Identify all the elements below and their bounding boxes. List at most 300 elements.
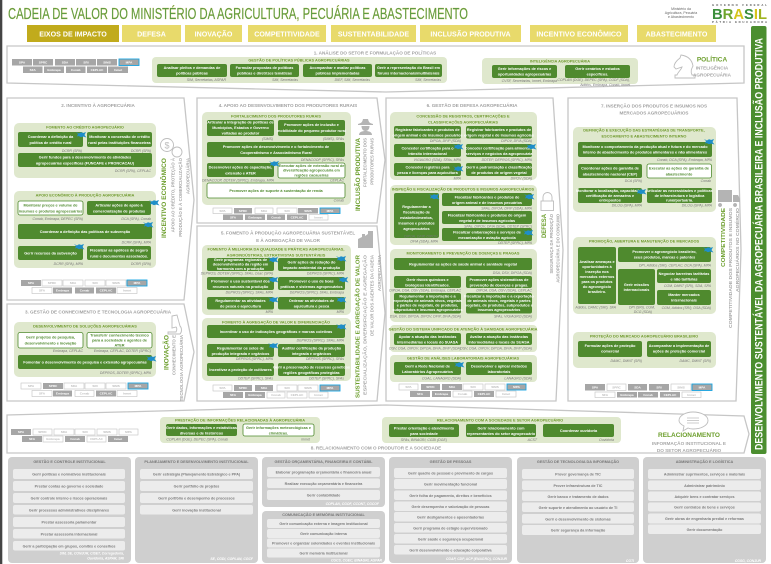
agency tags: Inmet	[123, 289, 131, 293]
process: monitorar preços: insumos e produtos agropecuários	[19, 210, 82, 214]
process: fiscalizar importação: de animais vivos, vegetais e partes	[467, 299, 531, 303]
agency tags: SFA	[39, 289, 46, 293]
process: monitorar preços: Conab, Embrapa, DEPEC (SPA)	[32, 217, 83, 221]
process: cenários e estudos: Adidos, Embrapa, Conab, Inmet	[579, 83, 631, 87]
process: padronização vegetal: de produtos de origem vegetal	[471, 171, 527, 175]
support panel: tecnologia da informação: Prover infraestrutura de TIC	[554, 484, 603, 488]
logo: Brasil government: PÁTRIA EDUCADORA	[712, 19, 767, 24]
process: auditar certificação: integrada e orgânicos	[292, 352, 331, 356]
group: estratégias de transporte	[573, 127, 716, 212]
process: produção orgânica: DEPROS (SPRC), MPA	[236, 357, 274, 361]
agency tags: MPA	[126, 60, 133, 64]
agency tags: SPA	[28, 281, 35, 285]
agency tags: Embrapa	[248, 393, 262, 397]
agency tags	[21, 280, 147, 294]
tab: abastecimento: ABASTECIMENTO	[646, 30, 708, 38]
tab: eixos de impacto: EIXOS DE IMPACTO	[39, 30, 107, 38]
icon: coins: $	[164, 140, 170, 150]
process: formular proteção: Formular ações de proteção	[585, 344, 636, 348]
agency tags: SPA	[219, 386, 226, 390]
process: registro origem vegetal: origem vegetal e de insumos agrícolas	[464, 134, 534, 138]
agency tags: SIMS	[103, 430, 111, 434]
process: proteção de cultivares: Incentivar a proteção de cultivares	[209, 368, 272, 372]
tab: defesa: DEFESA	[137, 30, 166, 38]
process: regulamentar fiscalização: Regulamentar a	[402, 205, 432, 209]
process: rede de laboratórios: CGAL, LANAGRO (SDA)	[422, 376, 461, 380]
agency tags: SIMS	[112, 384, 120, 388]
axis label: relacionamento: DO SETOR AGROPECUÁRIO	[657, 447, 722, 453]
group: inteligência agropecuária: INTELIGÊNCIA AGROPECUÁRIA	[530, 58, 590, 64]
agency tags: Inmet	[314, 216, 323, 220]
axis label: incentivo econômico: AGROPECUÁRIA	[186, 157, 190, 194]
process: extensão rural	[278, 163, 345, 182]
process: formular proteção: comercial	[601, 350, 619, 354]
agency tags: Conab	[80, 392, 89, 396]
group: agregação de valor	[202, 318, 351, 381]
agency tags: Conab	[71, 68, 81, 72]
process: informações de riscos: oportunidades agropecuárias	[498, 72, 551, 76]
process: saúde animal: DSA, DSV, DIPOA (SDA)	[493, 271, 532, 275]
process: regulamentar fiscalização	[394, 193, 439, 244]
process: registros de pesca: pesca e licenças para aquicultura	[397, 171, 459, 175]
group: agregação de valor: FOMENTO À AGREGAÇÃO DE VALOR E DIFERENCIAÇÃO	[222, 320, 330, 324]
process: avaliar instâncias	[460, 333, 532, 350]
axis label: sustentabilidade: AGROPECUÁRIA	[377, 254, 382, 291]
panel 2 heading: 2. INCENTIVO À AGROPECUÁRIA	[61, 102, 135, 108]
panel 5 heading: 5. FOMENTO À PRODUÇÃO AGROPECUÁRIA SUSTENTÁVEL	[221, 230, 355, 236]
axis label: incentivo econômico: APOIO AO CRÉDITO, PROTEÇÃO À	[170, 157, 176, 232]
process: fiscalizar importação: vegetais, de produtos, subprodutos e	[465, 304, 533, 308]
process: apólices de seguro: DCRR (SPA)	[131, 262, 151, 266]
panel 4: apoio aos produtores rurais	[197, 98, 385, 223]
process: apólices de seguro: rural e documentos associados.	[90, 254, 148, 258]
process: certificação internacional: VIGIAGRO (SDA), SFAs, MPA	[414, 158, 462, 162]
agency tags: SRI	[83, 60, 89, 64]
process: representantes do setor: ACST	[527, 438, 538, 442]
agency tags: CEPLAC	[291, 216, 304, 220]
agency tags: SRI	[284, 209, 290, 213]
group: inspeção e fiscalização	[390, 185, 537, 245]
support panel: gestão e controle institucional: Gerir controle interno e riscos operacionais	[31, 496, 107, 500]
agency tags: SPA	[28, 384, 35, 388]
process: regulamentar fiscalização: insumos e produtos	[398, 222, 435, 226]
process: programas regionais: Gerir programas regionais de	[214, 258, 267, 262]
support panel: gestão de pessoas: Gerir programa de estágio supervisionado	[413, 526, 488, 530]
process: uso sustentável	[207, 277, 274, 294]
support panel: gestão e controle institucional: Gerir processos administrativos disciplinares	[29, 508, 109, 512]
process: padronização vegetal: DIPOV (SDA)	[511, 176, 532, 180]
panel 5 heading: E À AGREGAÇÃO DE VALOR	[256, 237, 321, 243]
process: acompanhar políticas: Acompanhar e avaliar políticas	[310, 66, 365, 70]
process: extensão rural: Executar ações de extensão rural de	[279, 164, 344, 168]
support panel: tecnologia da informação: Gerir banco e tratamento de dados	[547, 495, 609, 499]
support panel: tecnologia da informação: Gerir o desenvolvimento de sistemas	[545, 517, 611, 521]
process: informações meteorológicas	[243, 424, 314, 442]
group: SUASA	[389, 325, 538, 352]
agency tags: SPRC	[612, 386, 622, 390]
process: impacto ambiental: Gerir ações de redução do	[288, 260, 336, 264]
axis label: inovação	[164, 334, 184, 401]
axis label: competitividade: COMPETITIVIDADE	[721, 208, 727, 267]
process: gerir dados: COPLAN (DGE), DEPEC (SPA), Conab	[166, 438, 228, 442]
agency tags: SDA	[71, 384, 78, 388]
group: apoio econômico	[14, 191, 156, 268]
group: estratégias de transporte: DEFINIÇÃO E EXECUÇÃO DAS ESTRATÉGIAS DE TRANSPORTE,	[583, 128, 705, 132]
group: registros e certificações: CLASSIFICAÇÕES AGROPECUÁRIAS	[428, 120, 498, 124]
blue fish markers	[74, 132, 714, 368]
support panel: gestão e controle institucional	[8, 457, 131, 563]
support panel: gestão orçamentária	[262, 457, 385, 507]
process: garantia de abastecimento	[578, 164, 642, 183]
agency tags: SFA	[39, 392, 46, 396]
process: registro origem vegetal: DIPOV, DFIA (SDA)	[501, 139, 532, 143]
process: produção orgânica: Regulamentar os selos de	[217, 346, 264, 350]
process: cooperativismo: Cooperativismo e Associativismo Rural	[240, 151, 312, 155]
process: fiscalizar importação	[464, 293, 535, 318]
axis label: inclusão produtiva	[355, 137, 374, 211]
process: representação do Brasil: SIM, Secretarias	[415, 78, 441, 82]
process: auditar certificação: DEPROS (SPRC), SFAs	[306, 357, 344, 361]
process: recursos da subvenção: Gerir recursos da subvenção	[24, 252, 77, 256]
process: analisar pleitos	[157, 64, 227, 82]
process: informações de riscos: CVSF, Secretarias, Inmet, Embrapa	[502, 79, 557, 83]
tab: incentivo econômico: INCENTIVO ECONÔMICO	[536, 30, 622, 38]
process: fiscalizar origem vegetal: Fiscalizar fabricantes e produtos de origem	[448, 214, 527, 218]
process: manter mercados	[657, 290, 711, 310]
support panel: gestão de pessoas: Gerir desligamentos e aposentadorias	[417, 515, 484, 519]
process: certificação alimentos: Conceder certificação para alimentos,	[465, 146, 533, 150]
process: analisar ameaças	[574, 247, 617, 310]
title: CADEIA DE VALOR DO MINISTÉRIO DA AGRICULTURA, PECUÁRIA E ABASTECIMENTO	[8, 6, 468, 23]
agency tags: SPRC	[426, 385, 436, 389]
agency tags: SDA	[62, 60, 69, 64]
support panel: administração e logística: Administrar suprimentos, serviços e materiais	[664, 472, 745, 476]
process: formular proteção	[578, 341, 642, 363]
process: fiscalizar embarcações: Fiscalizar embarcações e serviços de	[453, 230, 521, 234]
tab: competitividade	[248, 25, 326, 42]
process: uso sustentável: DEPROS (SPRC), SFAs, MPA	[226, 290, 274, 294]
agency tags: CEPLAC	[664, 393, 677, 397]
support panel: gestão orçamentária: Gerir contabilidade	[307, 494, 340, 498]
support panel: planejamento e desenvolvimento institucional: Gerir portfólio de projetos	[174, 484, 219, 488]
group: análises laboratoriais	[390, 355, 537, 382]
process: políticas de subvenção: Coordenar a definição das políticas de subvenção	[40, 230, 131, 234]
process: representação do Brasil: Gerir a representação do Brasil em	[377, 66, 441, 70]
agency tags: Inmet	[123, 392, 131, 396]
process: monitorar produção: Conab, DCA (SPA), Embrapa, MPA	[657, 158, 713, 162]
tab: incentivo econômico	[530, 25, 628, 42]
process: extensão rural: regiões cacaueiras	[294, 173, 329, 177]
tab: sustentabilidade	[331, 25, 416, 42]
process: manter mercados: CGM, Adidos (SRI), DSA (SDA)	[662, 306, 711, 310]
agency tags: Conab	[458, 392, 467, 396]
process: fiscalizar embarcações: mecanização e aviação agrícola	[458, 236, 517, 240]
process: recursos da subvenção	[18, 246, 84, 266]
process: garantia de abastecimento: abastecimento nacional (CEP)	[583, 172, 638, 176]
process: executar garantia: abastecimento	[666, 172, 693, 176]
process: infraestrutura	[646, 188, 713, 208]
axis label: incentivo econômico: INCENTIVO ECONÔMICO	[160, 158, 168, 238]
agency tags: CEPLAC	[478, 392, 491, 396]
support panel: gestão de pessoas: Gerir quadro de pessoal e provimento de cargos	[408, 472, 493, 476]
group: monitoramento de pragas	[389, 249, 537, 322]
process: sustentação de renda	[207, 183, 345, 202]
ministry logo text: Ministério da	[671, 7, 691, 11]
group: relacionamento com a sociedade	[382, 417, 621, 443]
process: fiscalizar origem animal: SFAs, DIPOA, DFIP (SDA), MPA	[481, 206, 533, 210]
process: orientação e atendimento: SFAs, BINAGRI, CGDI (DGE)	[401, 438, 447, 442]
tab: inovação: INOVAÇÃO	[195, 30, 233, 38]
process: fiscalizar origem animal: Fiscalizar fabricantes e produtos de	[455, 196, 519, 200]
support panel: planejamento e desenvolvimento institucional: PLANEJAMENTO E DESENVOLVIMENTO INSTITUCIONAL	[144, 460, 249, 464]
process: registros de pesca: Conceder registros para	[406, 166, 450, 170]
process: extensão rural: diversificação agropecuária em	[283, 169, 341, 173]
process: monitorar produção	[578, 142, 713, 162]
agency tags: SDA	[449, 385, 456, 389]
process: regulamentar importação	[390, 293, 463, 318]
agency tags: Conab	[643, 393, 653, 397]
agency tags	[399, 384, 526, 397]
agency tags	[213, 208, 340, 220]
process: executar garantia: Conab	[701, 179, 711, 183]
agency tags: Embrapa	[46, 437, 60, 441]
process: promover agronegócio	[618, 247, 712, 268]
agency tags: SDA	[261, 209, 268, 213]
support panel: gestão e controle institucional: Prestar assessoria parlamentar	[42, 520, 97, 524]
process: prevenção de doenças: DIPOA, DSA, DSV (SDA), CEPLAC	[476, 288, 532, 292]
process: apoiar instâncias: intermediárias e locais do SUASA	[397, 340, 458, 344]
agency tags: SDA	[70, 281, 77, 285]
process: riscos químicos: biológicos identificados.	[405, 284, 450, 288]
process: informações de riscos: Gerir informações de riscos e	[498, 67, 551, 71]
group: fortalecimento dos produtores: FORTALECIMENTO DOS PRODUTORES RURAIS	[231, 114, 321, 118]
support panel: tecnologia da informação: Gerir segurança da informação	[551, 528, 606, 532]
agency tags: Conab	[271, 393, 281, 397]
support panel: tecnologia da informação: Prover governança de TIC	[555, 472, 601, 476]
process: monitorar produção: Monitorar o comportamento da produção atual e futura e do mercado	[582, 145, 708, 149]
process: fiscalizar importação: Fiscalizar a importação e a exportação	[464, 294, 535, 298]
support panel: gestão orçamentária: COPLAN, CGOF, CCONT, CGCOF	[326, 502, 380, 506]
process: ouvidoria	[543, 424, 614, 442]
axis label: inovação: TECNOLOGIA AGROPECUÁRIA	[179, 334, 184, 401]
group: fomento ao crédito: FOMENTO AO CRÉDITO AGROPECUÁRIO	[46, 124, 124, 130]
axis label: política: POLÍTICA	[697, 54, 727, 64]
process: promover agronegócio: Promover o agronegócio brasileiro,	[632, 250, 697, 254]
agency tags: Embrapa	[248, 216, 262, 220]
process: proteção de cultivares: DDTEP (SPRC), SFAs	[238, 376, 273, 380]
process: certificação alimentos: serviços e negócios da agropecuária	[466, 152, 533, 156]
axis label: inclusão produtiva: INCLUSÃO PRODUTIVA	[355, 137, 362, 211]
process: missões internacionais: DCG (SDA)	[634, 310, 652, 314]
agency tags: Embrapa	[56, 392, 69, 396]
process: extensão rural: CEPLAC	[330, 178, 344, 182]
process: manter mercados: internacionais	[671, 298, 697, 302]
agency tags: SDA	[61, 430, 68, 434]
support panel: administração e logística: Administrar patrimônio	[684, 484, 726, 488]
agency tags: MPA	[134, 281, 141, 285]
process: gerir dados: diversas e de históricos	[180, 432, 223, 436]
process: integração de políticas: Articular a integração de políticas de	[207, 120, 274, 124]
process: produção orgânica	[207, 344, 274, 361]
process: representantes do setor: Gerir relacionamento com	[477, 426, 525, 430]
support panel: comunicação e memória: Gerir memória institucional	[300, 552, 347, 556]
panel 2: incentivo à agropecuária	[7, 98, 194, 300]
group: inspeção e fiscalização: INSPEÇÃO E FISCALIZAÇÃO DE PRODUTOS E INSUMOS AGROPECUÁRIOS	[392, 186, 535, 192]
agency tags: SDA	[261, 386, 268, 390]
agency tags: SIMS	[112, 281, 120, 285]
process: saúde animal: Regulamentar as ações de saúde animal e sanidade vegetal	[409, 262, 517, 266]
icon: padlock	[541, 192, 554, 210]
process: fomentar pesquisa: Fomentar o desenvolvimento de pesquisa e extensão agropecuárias	[23, 360, 147, 364]
support panel: comunicação e memória: COMUNICAÇÃO E MEMÓRIA INSTITUCIONAL	[282, 512, 365, 517]
process: rede de laboratórios	[394, 362, 461, 380]
agency tags: SIMS	[491, 385, 499, 389]
process: missões internacionais: Gerir missões	[624, 283, 649, 287]
process: regulamentar pesca	[207, 297, 274, 314]
agency tags: SFA	[417, 392, 424, 396]
agency tags: SPA	[592, 386, 599, 390]
group: estratégias de transporte: ESCOAMENTO E ABASTECIMENTO INTERNO	[602, 134, 686, 138]
agency tags: Conab	[271, 216, 281, 220]
process: ouvidoria: Coordenar ouvidoria	[560, 429, 598, 433]
process: regulamentar fiscalização: estabelecimentos,	[400, 216, 433, 220]
axis label: competitividade: COMPETITIVIDADE DOS PRODUTOS E INSUMOS	[728, 208, 733, 328]
agency tags: SPA	[405, 385, 412, 389]
process: fiscalizar origem animal: origem animal e de insumos pecuários	[452, 201, 522, 205]
agency tags: SRI	[82, 430, 88, 434]
process: registro origem vegetal	[464, 126, 534, 143]
process: monitorar concessão: rural pelas instituições financeiras	[88, 141, 151, 145]
process: avaliar instâncias: DSV, DSA, DIPOV, DIPOA, DFIA, DFIP (SDA)	[460, 346, 532, 350]
process: formular propostas: SIM, Secretarias	[272, 78, 298, 82]
process: programas regionais: harmonia com a produção	[217, 267, 265, 271]
process: política de crédito rural: política de crédito rural	[30, 141, 72, 145]
process: orientação e atendimento	[389, 424, 459, 442]
process: acompanhar políticas: DIEF, SIM, Secretarias	[335, 78, 370, 82]
support panel: comunicação e memória	[262, 511, 385, 563]
navigation tabs: impact axes	[27, 25, 716, 42]
process: projetos de pesquisa: desenvolvimento e inovação	[25, 342, 77, 346]
process: formular propostas: públicas e diretrizes temáticas	[237, 72, 292, 76]
group: prestação de informações: PRESTAÇÃO DE INFORMAÇÕES RELACIONADAS À AGROPECUÁRIA	[175, 418, 305, 422]
process: armazéns: Monitorar a localização, capacidade e	[576, 189, 644, 193]
agency tags: SPA	[219, 209, 226, 213]
agency tags: Inmet	[114, 437, 122, 441]
process: analisar ameaças: brasileiro.	[588, 290, 606, 294]
ministry logo text: Agricultura, Pecuária	[665, 11, 697, 15]
agency tags: Embrapa	[56, 289, 69, 293]
process: analisar ameaças: do agronegócio	[583, 285, 612, 289]
process: acompanhar proteção: ações de proteção comercial	[653, 350, 705, 354]
support panel: gestão e controle institucional: Prestar assessoria internacional	[41, 532, 97, 536]
process: regulamentar importação: DSA, DSV, DIPOA, DIPOV, DFIP, DFIA (SDA)	[390, 314, 461, 318]
process: barreiras tarifárias: e não tarifárias	[670, 278, 698, 282]
process: certificação internacional: trânsito internacional	[408, 152, 447, 156]
process: avaliar instâncias: intermediárias e locais do SUASA	[469, 340, 530, 344]
process: integração de políticas: voltadas ao produtor	[222, 132, 260, 136]
group: gestão de políticas públicas	[152, 57, 447, 83]
agency tags: CEPLAC	[291, 393, 304, 397]
ministry logo text	[665, 7, 697, 19]
process: fiscalizar embarcações: DDTEP (SPRC), MPA	[498, 241, 533, 245]
process: analisar ameaças: para os produtos	[581, 280, 613, 284]
agency tags: SPRC	[239, 386, 248, 390]
process: articular apoio: comercialização de produtos	[93, 210, 145, 214]
support panel: gestão de pessoas: CGAP, CDP, ACP (ENAGRO), CONJUR	[446, 557, 508, 561]
process: garantia de abastecimento: Coordenar ações de garantia de	[581, 166, 639, 170]
support panel: gestão e controle institucional: SIM, SE, CONJUR, CISET, Corregedoria,	[60, 552, 124, 556]
process: gerir fundos: agropecuárias específicas (FUNCAFE e PRONCACAU)	[36, 162, 135, 166]
process: articular apoio: Articular ações de apoio à	[95, 204, 144, 208]
axis label: defesa: AGROPECUÁRIA E DO CONSUMO	[556, 213, 560, 283]
agency tags: MPA	[327, 386, 334, 390]
group: análises laboratoriais: GESTÃO DE ANÁLISES LABORATORIAIS AGROPECUÁRIAS	[407, 356, 519, 360]
panel 1: análise do setor e formulação de políticas	[7, 46, 744, 92]
process: transferir conhecimento: Transferir conhecimento técnico	[90, 334, 150, 338]
agency tags: Embrapa	[435, 392, 448, 396]
process: indicações geográficas: DEPROS (SPRC), SFAs, MPA	[297, 338, 345, 342]
process: articular apoio	[87, 201, 151, 221]
process: inclusão e mobilidade: Promover ações de inclusão e	[284, 123, 339, 127]
agency tags: SRI	[92, 384, 98, 388]
icon: speech bubble	[679, 412, 708, 431]
process: regulamentar fiscalização: agropecuários	[403, 227, 430, 231]
process: monitorar concessão	[87, 132, 152, 153]
support panel: tecnologia da informação	[517, 457, 639, 563]
support panel: administração e logística: CGSG, CONJUR	[735, 559, 762, 563]
process: certificação alimentos	[465, 144, 533, 162]
process: registro origem animal	[392, 126, 463, 143]
process: riscos químicos: DIPOA, DSA, DSV (SDA), Embrapa, CEPLAC	[389, 288, 461, 292]
icon: factory	[358, 231, 373, 248]
agency tags: SIMS	[103, 60, 111, 64]
group: proteção do mercado: PROTEÇÃO DO MERCADO AGROPECUÁRIO BRASILEIRO	[590, 334, 698, 338]
axis label: inclusão produtiva: FORTALECIMENTO DOS	[362, 138, 368, 187]
process: monitorar concessão: Monitorar a concessão de crédito	[89, 135, 150, 139]
group: proteção do mercado	[573, 332, 716, 368]
agency tags: SRI	[656, 386, 662, 390]
process: regulamentar fiscalização: DIPOA, DFIP, DIPOV,	[404, 234, 438, 238]
agency tags	[213, 385, 340, 398]
process: fiscalizar importação: insumos agropecuários	[478, 308, 520, 312]
process: formular proteção: DAMC, DMNT (SRI)	[610, 359, 642, 363]
process: uso sustentável: Promover o uso sustentável dos	[211, 280, 270, 284]
support panel: planejamento e desenvolvimento institucional: Gerir portfólio e desempenho de processos	[158, 496, 235, 500]
agency tags: MPA	[699, 386, 706, 390]
group: monitoramento de pragas: MONITORAMENTO E PREVENÇÃO DE DOENÇAS E PRAGAS	[407, 250, 520, 256]
process: garantia de abastecimento: DCA (SPA)	[625, 179, 642, 183]
support panel: comunicação e memória: Gerir comunicação externa e imagem institucional	[279, 522, 368, 526]
group: prestação de informações	[160, 417, 320, 443]
process: armazéns: entrepostos	[599, 199, 621, 203]
agency tags: Inmet	[314, 393, 323, 397]
process: orientação e atendimento: Prestar orientação e atendimento	[394, 426, 455, 430]
process: infraestrutura: Articular as necessidades e políticas	[646, 189, 713, 193]
process: analisar ameaças: oportunidades à	[582, 265, 613, 269]
support panel: gestão de pessoas: Gerir movimentação funcional	[424, 482, 477, 486]
process: integração de políticas: Municípios, Estados e Governo	[212, 126, 269, 130]
process: registro origem vegetal: Registrar fabricantes e produtos de	[467, 128, 531, 132]
process: registro origem animal: Registrar fabricantes e produtos de	[395, 128, 460, 132]
axis label: defesa	[542, 213, 560, 283]
process: projetos de pesquisa: Embrapa, CEPLAC	[53, 349, 83, 353]
process: certificação alimentos: DDTEP, DEPROS (SPRC), MPA	[482, 158, 533, 162]
support panel: gestão de pessoas: Gerir folha de pagamento, direitos e benefícios	[409, 494, 492, 498]
process: regulamentar pesca: MPA	[266, 310, 274, 314]
axis label: inclusão produtiva: PRODUTORES RURAIS	[370, 138, 374, 185]
axis label: inovação: INOVAÇÃO	[164, 335, 170, 370]
process: promover agronegócio: seus produtos, marcas e patentes	[634, 256, 695, 260]
